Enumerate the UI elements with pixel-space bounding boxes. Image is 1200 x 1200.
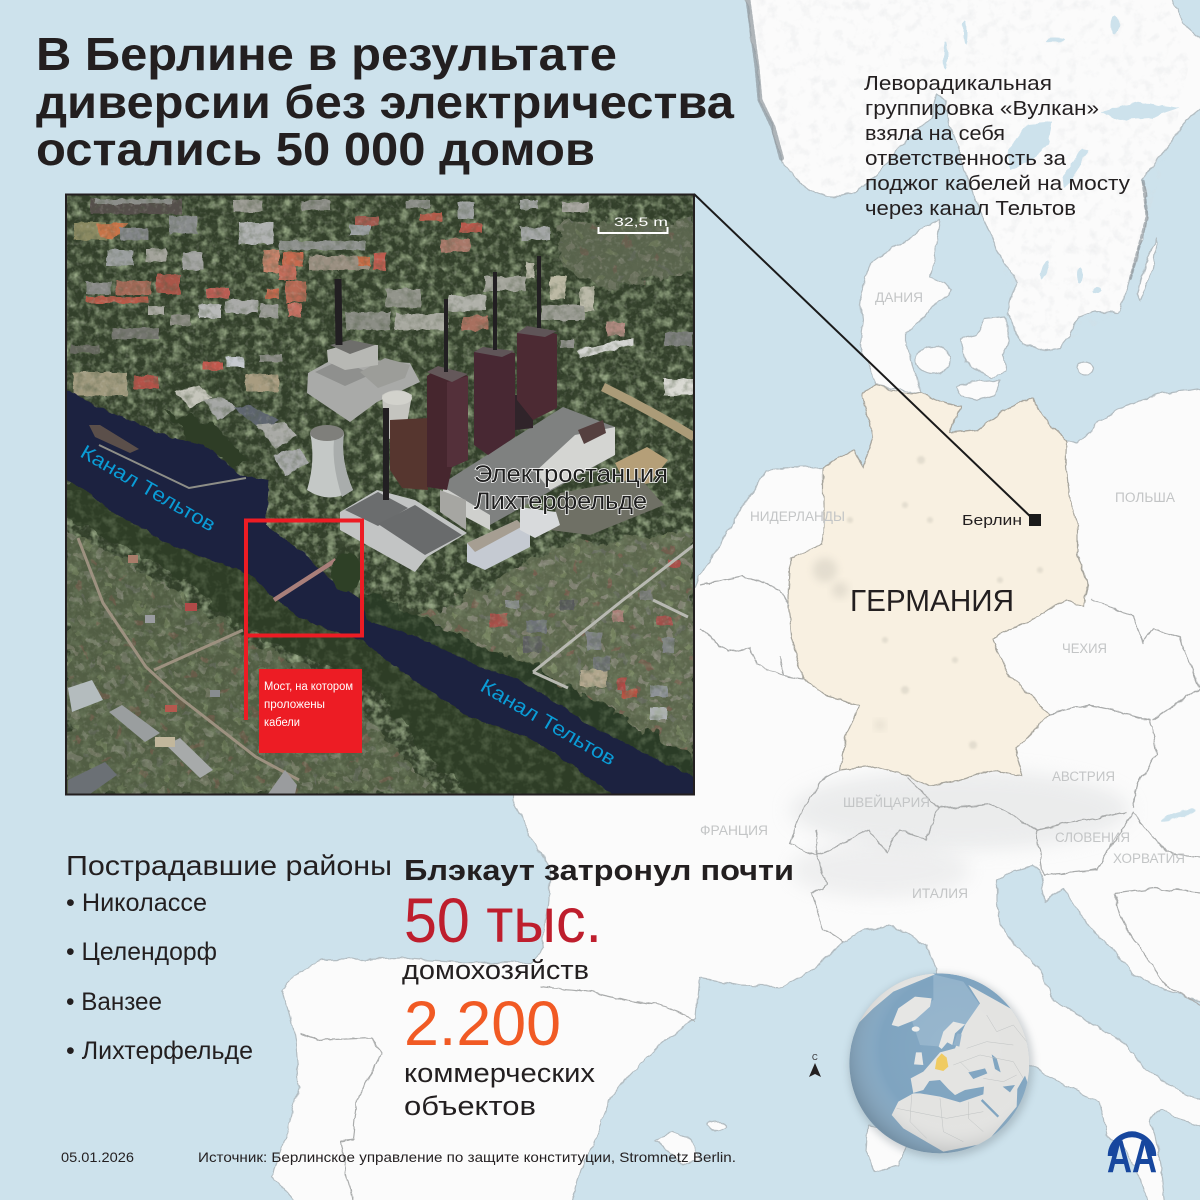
globe North America rim — [850, 965, 935, 1032]
cooling tower — [307, 428, 353, 498]
land: continental Europe — [272, 385, 1200, 1200]
label: Netherlands: НИДЕРЛАНДЫ — [750, 509, 845, 524]
stat: households number: 50 тыс. — [404, 886, 602, 956]
road right — [533, 545, 694, 688]
globe Italy — [942, 1078, 958, 1095]
land: Bornholm — [1077, 363, 1093, 375]
list: districts: • Лихтерфельде — [66, 1037, 253, 1065]
second cooling tower top — [382, 391, 412, 405]
footbridge — [274, 560, 336, 600]
label: Czechia: ЧЕХИЯ — [1062, 641, 1107, 656]
residential buildings upper right — [346, 200, 694, 395]
map: country borders — [299, 576, 1200, 1200]
power station buildings — [307, 340, 668, 572]
globe shading — [849, 973, 1029, 1153]
label: power station: Лихтерфельде — [474, 488, 647, 515]
title: остались 50 000 домов — [36, 123, 595, 175]
tree patch at bridge end — [331, 552, 361, 592]
date: 05.01.2026 — [61, 1149, 134, 1165]
tree belt along canal north bank — [350, 590, 694, 785]
globe Baltic — [953, 1033, 962, 1047]
icon: north arrow: С — [812, 1053, 818, 1062]
globe Mediterranean — [912, 1080, 984, 1102]
canal water — [66, 390, 700, 800]
globe Iceland — [912, 1026, 920, 1032]
list: districts: • Николассе — [66, 889, 207, 917]
label: Austria: АВСТРИЯ — [1052, 769, 1115, 784]
stack block beside tower 1 — [390, 418, 428, 490]
title: диверсии без электричества — [36, 76, 734, 128]
source: Источник: Берлинское управление по защите конституции, Stromnetz Berlin. — [198, 1149, 736, 1165]
globe Red Sea — [982, 1100, 998, 1117]
globe Eurasia and Africa — [892, 985, 1040, 1152]
label: Croatia: ХОРВАТИЯ — [1113, 851, 1185, 866]
globe Greenland — [892, 997, 932, 1027]
photo base: tree cover — [66, 195, 694, 794]
leader line: photo to Berlin — [694, 194, 1034, 520]
text block: group claim: поджог кабелей на мосту — [865, 172, 1131, 195]
land: Jutland — [860, 220, 953, 393]
globe Indian Ocean — [991, 1076, 1033, 1138]
stat: households label: домохозяйств — [402, 955, 589, 985]
marker: Berlin — [1029, 514, 1041, 526]
globe ocean — [849, 973, 1029, 1153]
map: land masses — [272, 0, 1200, 1200]
photo frame — [66, 194, 694, 794]
panel: aerial photo of Lichterfelde power plant — [66, 194, 700, 800]
label: canal upper: Канал Тельтов — [76, 441, 219, 536]
label: Switzerland: ШВЕЙЦАРИЯ — [843, 795, 930, 810]
icon: north arrow — [809, 1053, 821, 1077]
land: Zealand — [960, 318, 1010, 378]
Germany urban speckles — [813, 456, 1043, 749]
globe locator — [849, 965, 1040, 1158]
title: В Берлине в результате — [36, 28, 617, 80]
heading: blackout: Блэкаут затронул почти — [404, 855, 794, 887]
label: canal lower: Канал Тельтов — [476, 675, 619, 770]
dark foliage shadows — [66, 195, 694, 794]
globe Arctic inlet — [873, 997, 900, 1010]
speck texture — [66, 195, 694, 794]
lakes — [943, 16, 1196, 823]
text block: group claim: через канал Тельтов — [865, 197, 1076, 220]
lower-left blocks — [68, 555, 297, 794]
scale bar — [598, 215, 668, 233]
globe Scandinavia — [939, 1022, 965, 1049]
land: Lolland — [957, 380, 1000, 400]
callout: bridge with cables: Мост, на котором — [264, 681, 353, 693]
foliage on belts — [66, 490, 694, 794]
land: Gotland — [1137, 238, 1158, 302]
land: Scandinavia — [745, 0, 1200, 350]
list: districts: • Ванзее — [66, 988, 162, 1016]
label: Poland: ПОЛЬША — [1115, 490, 1175, 505]
globe Germany — [935, 1053, 948, 1071]
second cooling tower — [382, 390, 412, 440]
title — [36, 28, 734, 175]
trees upper bank — [166, 412, 253, 468]
globe Persian Gulf — [1003, 1085, 1015, 1092]
label: Slovenia: СЛОВЕНИЯ — [1055, 830, 1130, 845]
list: districts — [66, 889, 253, 1065]
land: small island — [707, 1122, 727, 1130]
tower 2 — [474, 347, 515, 455]
allotment houses lower right — [490, 560, 680, 720]
text block: group claim — [864, 72, 1131, 220]
text block: group claim: взяла на себя — [865, 122, 1005, 145]
callout: bridge with cables — [259, 669, 362, 753]
callout: bridge with cables: проложены — [264, 699, 325, 711]
tan path right — [603, 387, 694, 437]
stat: commercial label — [404, 1058, 596, 1121]
label: power station — [474, 461, 668, 515]
terrain shading — [747, 0, 1197, 898]
path lower left — [78, 538, 299, 780]
globe Caspian — [992, 1054, 1001, 1072]
barge and dock — [89, 425, 246, 488]
scale bar: 32,5 m — [614, 215, 668, 229]
land: Sardinia — [866, 1125, 908, 1172]
Norway rugged coast — [748, 0, 1147, 280]
land: Funen — [916, 346, 950, 374]
label: Italy: ИТАЛИЯ — [912, 886, 968, 901]
land: Balearic island — [655, 1132, 700, 1166]
cooling tower top — [310, 425, 344, 441]
panel: blackout statistics — [402, 855, 794, 1121]
tower 3 — [515, 326, 557, 430]
label: Berlin: Берлин — [962, 512, 1022, 529]
globe Black Sea — [968, 1068, 987, 1079]
text block: group claim: группировка «Вулкан» — [865, 97, 1099, 120]
globe Britain — [914, 1052, 923, 1065]
highlight frame: bridge — [246, 520, 362, 636]
allotment ground — [66, 220, 694, 794]
label: France: ФРАНЦИЯ — [700, 823, 768, 838]
stat: commercial label: коммерческих — [404, 1058, 596, 1088]
text block: affected districts — [66, 850, 392, 1065]
connector: frame to callout — [244, 636, 248, 720]
stat: commercial number: 2.200 — [404, 989, 561, 1059]
cooling tower shade — [334, 433, 353, 497]
label: power station: Электростанция — [474, 461, 668, 488]
residential buildings upper left — [70, 199, 386, 396]
chimney stacks — [338, 256, 539, 500]
tower 1 — [427, 366, 468, 490]
tree belt along canal south bank — [67, 482, 610, 794]
text block: group claim: Леворадикальная — [864, 72, 1052, 95]
globe shallow Arctic — [910, 974, 980, 1047]
label: Denmark: ДАНИЯ — [875, 290, 923, 305]
callout: bridge with cables: кабели — [264, 717, 300, 729]
map: country labels — [700, 290, 1185, 901]
text block: group claim: ответственность за — [865, 147, 1067, 170]
globe internal borders — [897, 1015, 1027, 1142]
land: Germany highlighted — [788, 385, 1088, 786]
logo: Anadolu Agency: AA — [1107, 1130, 1157, 1182]
label: Germany: ГЕРМАНИЯ — [850, 583, 1014, 618]
heading: affected districts: Пострадавшие районы — [66, 850, 392, 881]
industrial sheds beside canal — [174, 385, 309, 476]
list: districts: • Целендорф — [66, 938, 217, 966]
foliage highlights — [66, 195, 694, 794]
stat: commercial label: объектов — [404, 1091, 536, 1121]
